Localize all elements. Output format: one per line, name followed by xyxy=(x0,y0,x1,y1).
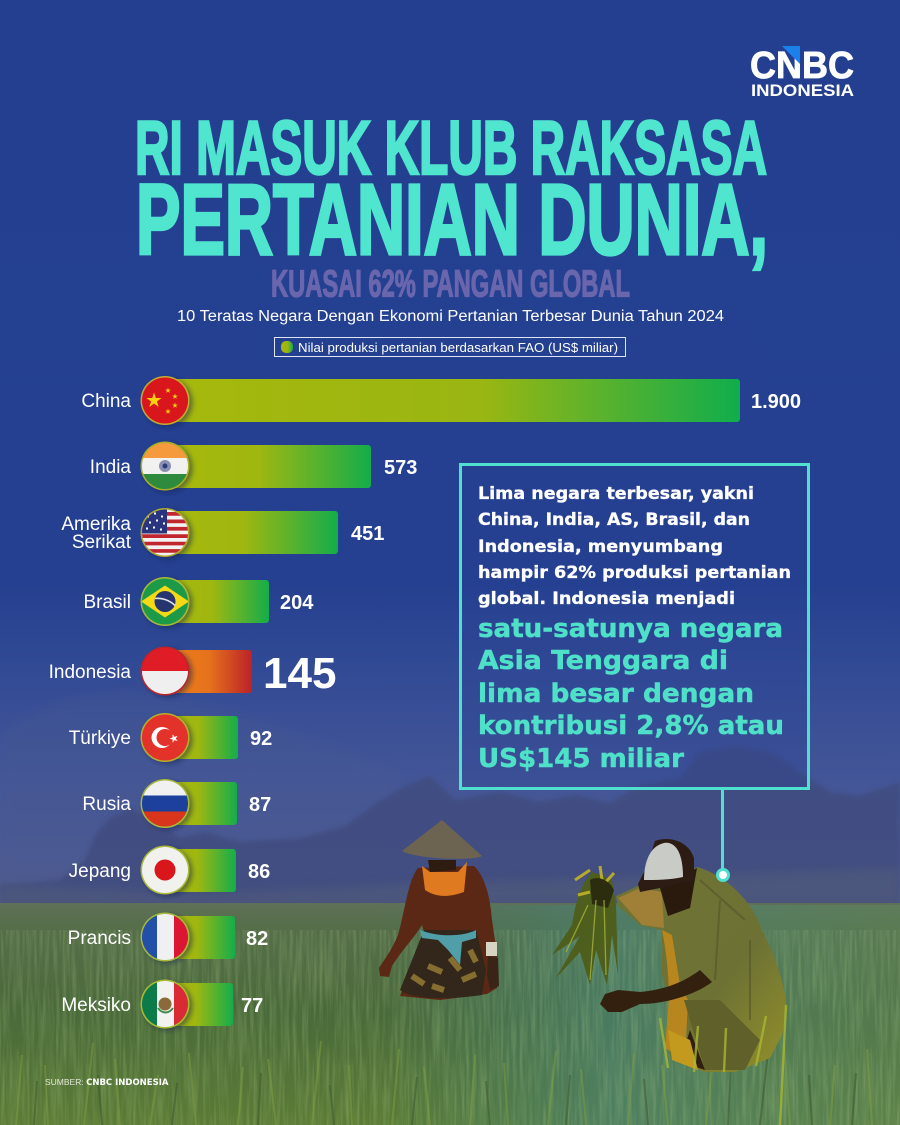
callout white text xyxy=(478,484,791,609)
row: Jepang xyxy=(69,846,270,894)
row: Indonesia (highlighted) xyxy=(49,646,336,698)
row: Türkiye: Türkiye xyxy=(69,728,131,749)
row: India: India xyxy=(90,457,131,478)
illustration: woman farmer with conical hat xyxy=(379,820,499,1000)
logo: CNBC Indonesia: INDONESIA xyxy=(751,81,854,100)
row: Brasil xyxy=(83,577,314,626)
callout highlighted text: Asia Tenggara di xyxy=(478,646,728,676)
illustration: rice seedling bundle xyxy=(552,866,618,985)
row: Indonesia (highlighted): 145 xyxy=(263,649,336,698)
row: India: 573 xyxy=(384,457,417,479)
callout white text: China, India, AS, Brasil, dan xyxy=(478,510,750,530)
row: China: China xyxy=(81,391,131,412)
row: Jepang: 86 xyxy=(248,861,270,883)
row: Meksiko: Meksiko xyxy=(61,995,131,1016)
row: India xyxy=(90,442,417,490)
row: Amerika Serikat: Serikat xyxy=(72,532,132,553)
row: Amerika Serikat: 451 xyxy=(351,523,384,545)
callout white text: Lima negara terbesar, yakni xyxy=(478,484,754,504)
callout highlighted text: kontribusi 2,8% atau xyxy=(478,711,784,741)
chart description: 10 Teratas Negara Dengan Ekonomi Pertanian Terbesar Dunia Tahun 2024 xyxy=(177,308,724,325)
callout connector line and dot xyxy=(718,789,728,880)
callout white text: global. Indonesia menjadi xyxy=(478,589,735,609)
source note: SUMBER: CNBC INDONESIA xyxy=(45,1077,169,1088)
row: Prancis: Prancis xyxy=(68,928,131,949)
row: China: 1.900 xyxy=(751,391,801,413)
row: Prancis xyxy=(68,912,268,962)
row: Türkiye: 92 xyxy=(250,728,272,750)
row: Amerika Serikat xyxy=(61,508,384,557)
row: Brasil: 204 xyxy=(280,592,314,614)
legend: Nilai produksi pertanian berdasarkan FAO (US$ miliar) xyxy=(298,340,618,355)
callout white text: Indonesia, menyumbang xyxy=(478,537,723,557)
callout highlighted text: lima besar dengan xyxy=(478,679,754,709)
bar chart: top 10 countries xyxy=(49,376,801,1028)
row: Jepang: Jepang xyxy=(69,861,131,882)
row: Rusia: Rusia xyxy=(82,794,131,815)
row: Amerika Serikat: Amerika xyxy=(61,514,131,535)
row: Rusia: 87 xyxy=(249,794,271,816)
callout highlighted text xyxy=(478,614,784,774)
row: Türkiye xyxy=(69,713,272,762)
row: Brasil: Brasil xyxy=(83,592,131,613)
logo: CNBC Indonesia: CNBC xyxy=(750,45,854,87)
callout: key finding xyxy=(460,464,808,788)
title xyxy=(135,106,768,276)
illustration: man farmer with cap xyxy=(600,839,787,1125)
callout highlighted text: US$145 miliar xyxy=(478,744,684,774)
row: Meksiko: 77 xyxy=(241,995,263,1017)
callout highlighted text: satu-satunya negara xyxy=(478,614,783,644)
row: Indonesia (highlighted): Indonesia xyxy=(49,662,131,683)
row: Meksiko xyxy=(61,980,263,1028)
callout white text: hampir 62% produksi pertanian xyxy=(478,563,791,583)
row: China xyxy=(81,376,801,425)
row: Prancis: 82 xyxy=(246,928,268,950)
row: Rusia xyxy=(82,779,271,828)
subtitle: global food share: KUASAI 62% PANGAN GLOBAL xyxy=(271,264,630,306)
